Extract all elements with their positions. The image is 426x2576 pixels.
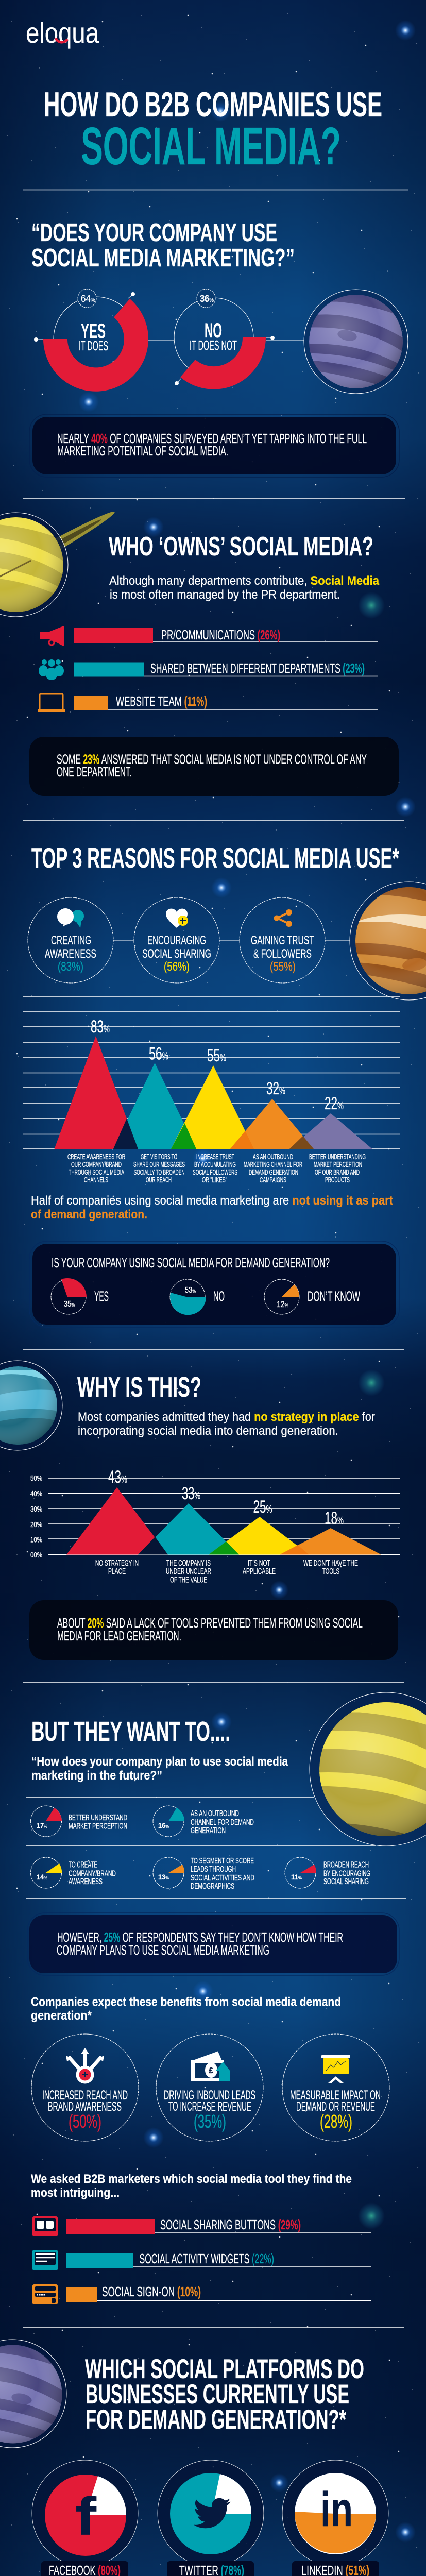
stat: 16%: AS AN OUTBOUND bbox=[191, 1809, 239, 1818]
text: departments contribute: Although many departments contribute, Social Media bbox=[109, 574, 380, 588]
labels under triangles: MARKETING CHANNEL FOR bbox=[244, 1160, 302, 1169]
panel: driving inbound leads: DRIVING INBOUND LEADS bbox=[164, 2088, 255, 2103]
text: half of companies: Half of companies using social media marketing are not using it as part bbox=[31, 1194, 393, 1208]
bar: website team bbox=[74, 693, 378, 710]
heading: does your company use social media marketing: SOCIAL MEDIA MARKETING?” bbox=[31, 244, 295, 272]
labels under triangles: OUR COMPANY/BRAND bbox=[71, 1160, 122, 1169]
callout: nearly 40%: MARKETING POTENTIAL OF SOCIAL MEDIA. bbox=[57, 443, 228, 459]
panel: driving inbound leads bbox=[156, 2034, 263, 2141]
text: no strategy in place: Most companies admitted they had no strategy in place for bbox=[78, 1410, 375, 1424]
chart: why triangles: 00% bbox=[30, 1551, 42, 1560]
stat: 13%: TO SEGMENT OR SCORE bbox=[191, 1857, 254, 1866]
bar: PR communications bbox=[74, 627, 378, 643]
panel: creating awareness: AWARENESS bbox=[45, 947, 96, 961]
bar: activity widgets bbox=[66, 2251, 371, 2268]
icon: branching arrows bbox=[66, 2048, 104, 2083]
panel: gaining trust and followers: & FOLLOWERS bbox=[253, 947, 312, 961]
icon: activity widgets bbox=[32, 2250, 58, 2270]
bar: sign-on bbox=[66, 2284, 371, 2302]
labels under why triangles: NO STRATEGY IN bbox=[95, 1559, 139, 1568]
panel: driving inbound leads: (35%) bbox=[194, 2111, 226, 2132]
heading: does your company use social media marketing bbox=[31, 219, 295, 272]
chart: yes donut 64%: YES bbox=[81, 320, 106, 343]
text: no strategy in place: incorporating social media into demand generation. bbox=[78, 1424, 338, 1438]
labels under triangles: BETTER UNDERSTANDING bbox=[309, 1153, 366, 1161]
labels under triangles: SHARE OUR MESSAGES bbox=[133, 1160, 185, 1169]
chart: why triangles: 18% bbox=[325, 1509, 344, 1528]
labels under why triangles: UNDER UNCLEAR bbox=[166, 1567, 211, 1576]
stat: 13%: LEADS THROUGH bbox=[191, 1865, 236, 1874]
labels under triangles: INCREASE TRUST bbox=[196, 1153, 234, 1161]
bar: shared between departments bbox=[74, 660, 378, 677]
panel: gaining trust and followers: GAINING TRUST bbox=[251, 934, 314, 947]
labels under why triangles: WE DON’T HAVE THE bbox=[303, 1559, 358, 1568]
text: expected benefits: Companies expect these benefits from social media demand bbox=[31, 1995, 341, 2009]
bar: social sharing buttons: SOCIAL SHARING BUTTONS (29%) bbox=[160, 2217, 301, 2232]
labels under why triangles: PLACE bbox=[108, 1567, 126, 1576]
callout: some 23% bbox=[29, 737, 399, 796]
icon: share bbox=[274, 909, 292, 927]
panel: encouraging social sharing: ENCOURAGING bbox=[147, 934, 206, 947]
panel: measurable impact: (28%) bbox=[320, 2111, 352, 2132]
bar: sign-on: SOCIAL SIGN-ON (10%) bbox=[102, 2284, 201, 2299]
stat: 16%: CHANNEL FOR DEMAND bbox=[191, 1818, 254, 1827]
stat: 17%: BETTER UNDERSTAND bbox=[69, 1814, 127, 1822]
chart: top reasons triangles: 22% bbox=[325, 1094, 344, 1113]
panel: creating awareness: (83%) bbox=[58, 960, 83, 974]
stat: 11%: BROADEN REACH bbox=[323, 1861, 369, 1869]
icon: cash: £ bbox=[209, 2066, 213, 2075]
icon: laptop bbox=[38, 694, 65, 712]
stat: 11%: SOCIAL SHARING bbox=[323, 1877, 369, 1886]
panel: linkedin 51% bbox=[282, 2460, 388, 2576]
icon: sign-on bbox=[32, 2284, 58, 2304]
labels under triangles: CAMPAIGNS bbox=[260, 1176, 286, 1184]
chart: why triangles: 33% bbox=[182, 1484, 200, 1503]
stat: 14% bbox=[31, 1857, 116, 1888]
labels under triangles: OF OUR BRAND AND bbox=[315, 1168, 360, 1177]
text: half of companies bbox=[31, 1194, 393, 1222]
text: we asked b2b marketers: most intriguing... bbox=[31, 2186, 120, 2200]
labels under triangles: OUR REACH bbox=[146, 1176, 172, 1184]
panel: increased reach bbox=[31, 2034, 139, 2141]
chart: yes pie bbox=[51, 1278, 109, 1314]
panel: creating awareness: CREATING bbox=[51, 934, 91, 947]
labels under why triangles: THE COMPANY IS bbox=[166, 1559, 211, 1568]
title bbox=[44, 85, 382, 176]
text: future plan question: “How does your company plan to use social media bbox=[31, 1755, 288, 1769]
labels under triangles: MARKET PERCEPTION bbox=[314, 1160, 362, 1169]
text: we asked b2b marketers: We asked B2B marketers which social media tool they find the bbox=[31, 2172, 352, 2186]
labels under why triangles: OF THE VALUE bbox=[170, 1575, 207, 1585]
labels under why triangles bbox=[95, 1559, 358, 1585]
chart: top reasons triangles: 56% bbox=[149, 1044, 168, 1063]
bar: social sharing buttons bbox=[66, 2217, 371, 2234]
labels under triangles: GET VISITORS TO bbox=[141, 1153, 177, 1161]
labels under triangles: PRODUCTS bbox=[325, 1176, 350, 1184]
chart: don't know pie: 12% bbox=[277, 1299, 288, 1309]
panel: gaining trust and followers bbox=[240, 897, 325, 983]
icon: chat bubbles bbox=[57, 908, 84, 928]
text: no strategy in place bbox=[78, 1410, 375, 1438]
heading: but they want to: BUT THEY WANT TO.... bbox=[31, 1716, 230, 1747]
icon: purple planet bbox=[304, 290, 408, 394]
text: expected benefits bbox=[31, 1995, 341, 2023]
callout: however 25%: COMPANY PLANS TO USE SOCIAL MEDIA MARKETING bbox=[57, 1942, 269, 1958]
callout: about 20%: MEDIA FOR LEAD GENERATION. bbox=[57, 1628, 181, 1643]
chart: why triangles: 25% bbox=[253, 1497, 272, 1517]
icon: presentation board bbox=[321, 2055, 350, 2083]
chart: no donut 36%: 36% bbox=[200, 294, 214, 304]
callout: nearly 40% bbox=[29, 414, 399, 477]
bar: website team: WEBSITE TEAM (11%) bbox=[116, 693, 207, 709]
labels under triangles: DEMAND GENERATION bbox=[249, 1168, 298, 1177]
callout: however 25% bbox=[27, 1913, 399, 1975]
labels under why triangles: APPLICABLE bbox=[243, 1567, 276, 1576]
heading: why is this: WHY IS THIS? bbox=[77, 1371, 201, 1403]
chart: top reasons triangles bbox=[23, 997, 400, 1184]
panel: encouraging social sharing: (56%) bbox=[164, 960, 190, 974]
labels under triangles: CHANNELS bbox=[84, 1176, 108, 1184]
callout: some 23%: ONE DEPARTMENT. bbox=[57, 764, 132, 779]
labels under triangles: CREATE AWARENESS FOR bbox=[67, 1153, 125, 1161]
chart: why triangles bbox=[30, 1467, 400, 1585]
labels under triangles: BY ACCUMULATING bbox=[194, 1160, 236, 1169]
labels under why triangles: IT’S NOT bbox=[248, 1559, 270, 1568]
stat: 11%: BY ENCOURAGING bbox=[323, 1869, 370, 1878]
labels under triangles: THROUGH SOCIAL MEDIA bbox=[69, 1168, 124, 1177]
labels under triangles: OR "LIKES" bbox=[202, 1176, 227, 1184]
callout: about 20% bbox=[29, 1600, 398, 1660]
stat: 17% bbox=[31, 1806, 127, 1837]
chart: top reasons triangles: 83% bbox=[91, 1017, 110, 1037]
icon: megaphone bbox=[40, 626, 64, 646]
stat: 14%: COMPANY/BRAND bbox=[69, 1869, 116, 1878]
labels under triangles bbox=[67, 1153, 366, 1184]
chart: no donut 36% bbox=[174, 289, 304, 389]
text: departments contribute bbox=[109, 574, 380, 602]
logo: eloqua: eloqua bbox=[26, 16, 99, 49]
stat: 16%: GENERATION bbox=[191, 1826, 226, 1835]
chart: why triangles: 43% bbox=[108, 1467, 127, 1487]
text: future plan question bbox=[31, 1755, 288, 1783]
chart: don't know pie: DON’T KNOW bbox=[308, 1289, 360, 1304]
text: expected benefits: generation* bbox=[31, 2009, 92, 2023]
panel: linkedin 51%: in bbox=[320, 2482, 353, 2537]
panel: gaining trust and followers: (55%) bbox=[270, 960, 296, 974]
stat: 17%: 17% bbox=[37, 1821, 47, 1829]
icon: cash bbox=[191, 2052, 230, 2081]
stat: 14%: 14% bbox=[37, 1873, 47, 1881]
stat: 13%: DEMOGRAPHICS bbox=[191, 1882, 234, 1891]
chart: don't know pie bbox=[264, 1279, 360, 1314]
stat: 13%: 13% bbox=[158, 1873, 169, 1881]
panel: creating awareness bbox=[28, 897, 113, 983]
text: half of companies: of demand generation. bbox=[31, 1208, 147, 1222]
stat: 13%: SOCIAL ACTIVITIES AND bbox=[191, 1874, 254, 1883]
stat: 16%: 16% bbox=[158, 1821, 169, 1829]
heading: which social platforms bbox=[85, 2354, 364, 2435]
chart: no pie: NO bbox=[213, 1289, 225, 1304]
chart: top reasons triangles: 55% bbox=[207, 1046, 226, 1065]
text: future plan question: marketing in the future?” bbox=[31, 1769, 162, 1783]
bar: activity widgets: SOCIAL ACTIVITY WIDGETS (22%) bbox=[139, 2251, 274, 2266]
labels under triangles: SOCIAL FOLLOWERS bbox=[193, 1168, 237, 1177]
chart: why triangles: 30% bbox=[30, 1505, 42, 1514]
chart: no donut 36%: NO bbox=[205, 319, 222, 342]
heading: does your company use social media marketing: “DOES YOUR COMPANY USE bbox=[31, 219, 277, 247]
bar: PR communications: PR/COMMUNICATIONS (26%) bbox=[161, 627, 280, 642]
stat: 11%: 11% bbox=[291, 1873, 302, 1881]
chart: no pie bbox=[170, 1279, 225, 1315]
panel: twitter 78% bbox=[158, 2460, 264, 2576]
icon: saturn planet bbox=[0, 512, 115, 617]
chart: why triangles: 50% bbox=[30, 1474, 42, 1483]
chart: why triangles: 10% bbox=[30, 1535, 42, 1545]
chart: top reasons triangles: 32% bbox=[266, 1079, 285, 1098]
icon: social sharing buttons bbox=[32, 2216, 58, 2236]
icon: yellow planet bbox=[310, 1692, 426, 1850]
icon: uranus planet bbox=[0, 1361, 62, 1450]
panel: facebook 80% bbox=[32, 2460, 138, 2576]
chart: yes pie: YES bbox=[94, 1289, 109, 1304]
chart: yes donut 64%: IT DOES bbox=[79, 338, 108, 353]
labels under triangles: AS AN OUTBOUND bbox=[253, 1153, 293, 1161]
stat: 14%: AWARENESS bbox=[69, 1877, 103, 1886]
panel: measurable impact bbox=[282, 2034, 389, 2141]
icon: jupiter planet bbox=[350, 882, 426, 1000]
chart: why triangles: 20% bbox=[30, 1520, 42, 1529]
stat: 13% bbox=[153, 1857, 254, 1891]
panel: increased reach: BRAND AWARENESS bbox=[48, 2099, 122, 2114]
chart: no donut 36%: IT DOES NOT bbox=[190, 337, 237, 353]
chart: yes donut 64%: 64% bbox=[81, 294, 95, 304]
chart: no pie: 53% bbox=[185, 1286, 196, 1295]
text: departments contribute: is most often managed by the PR department. bbox=[110, 588, 340, 602]
stat: 17%: MARKET PERCEPTION bbox=[69, 1822, 127, 1831]
panel: encouraging social sharing: SOCIAL SHARING bbox=[142, 947, 211, 961]
stat: 16% bbox=[153, 1806, 254, 1837]
text: we asked b2b marketers bbox=[31, 2172, 352, 2200]
panel: demand generation pies bbox=[29, 1241, 399, 1327]
labels under triangles: SOCIALLY TO BROADEN bbox=[134, 1168, 184, 1177]
icon: purple planet left bbox=[0, 2340, 66, 2448]
labels under why triangles: TOOLS bbox=[322, 1567, 339, 1576]
chart: yes donut 64% bbox=[34, 289, 174, 392]
panel: driving inbound leads: TO INCREASE REVENUE bbox=[168, 2099, 251, 2114]
icon: heart with plus bbox=[166, 909, 188, 928]
stat: 14%: TO CREATE bbox=[69, 1861, 97, 1869]
panel: increased reach: INCREASED REACH AND bbox=[42, 2088, 128, 2103]
icon: people bbox=[39, 659, 64, 680]
stat: 11% bbox=[285, 1857, 370, 1888]
panel: increased reach: (50%) bbox=[69, 2111, 101, 2132]
panel: facebook 80%: f bbox=[75, 2487, 96, 2547]
chart: yes pie: 35% bbox=[64, 1300, 75, 1309]
panel: encouraging social sharing bbox=[113, 897, 350, 983]
chart: why triangles: 40% bbox=[30, 1489, 42, 1498]
